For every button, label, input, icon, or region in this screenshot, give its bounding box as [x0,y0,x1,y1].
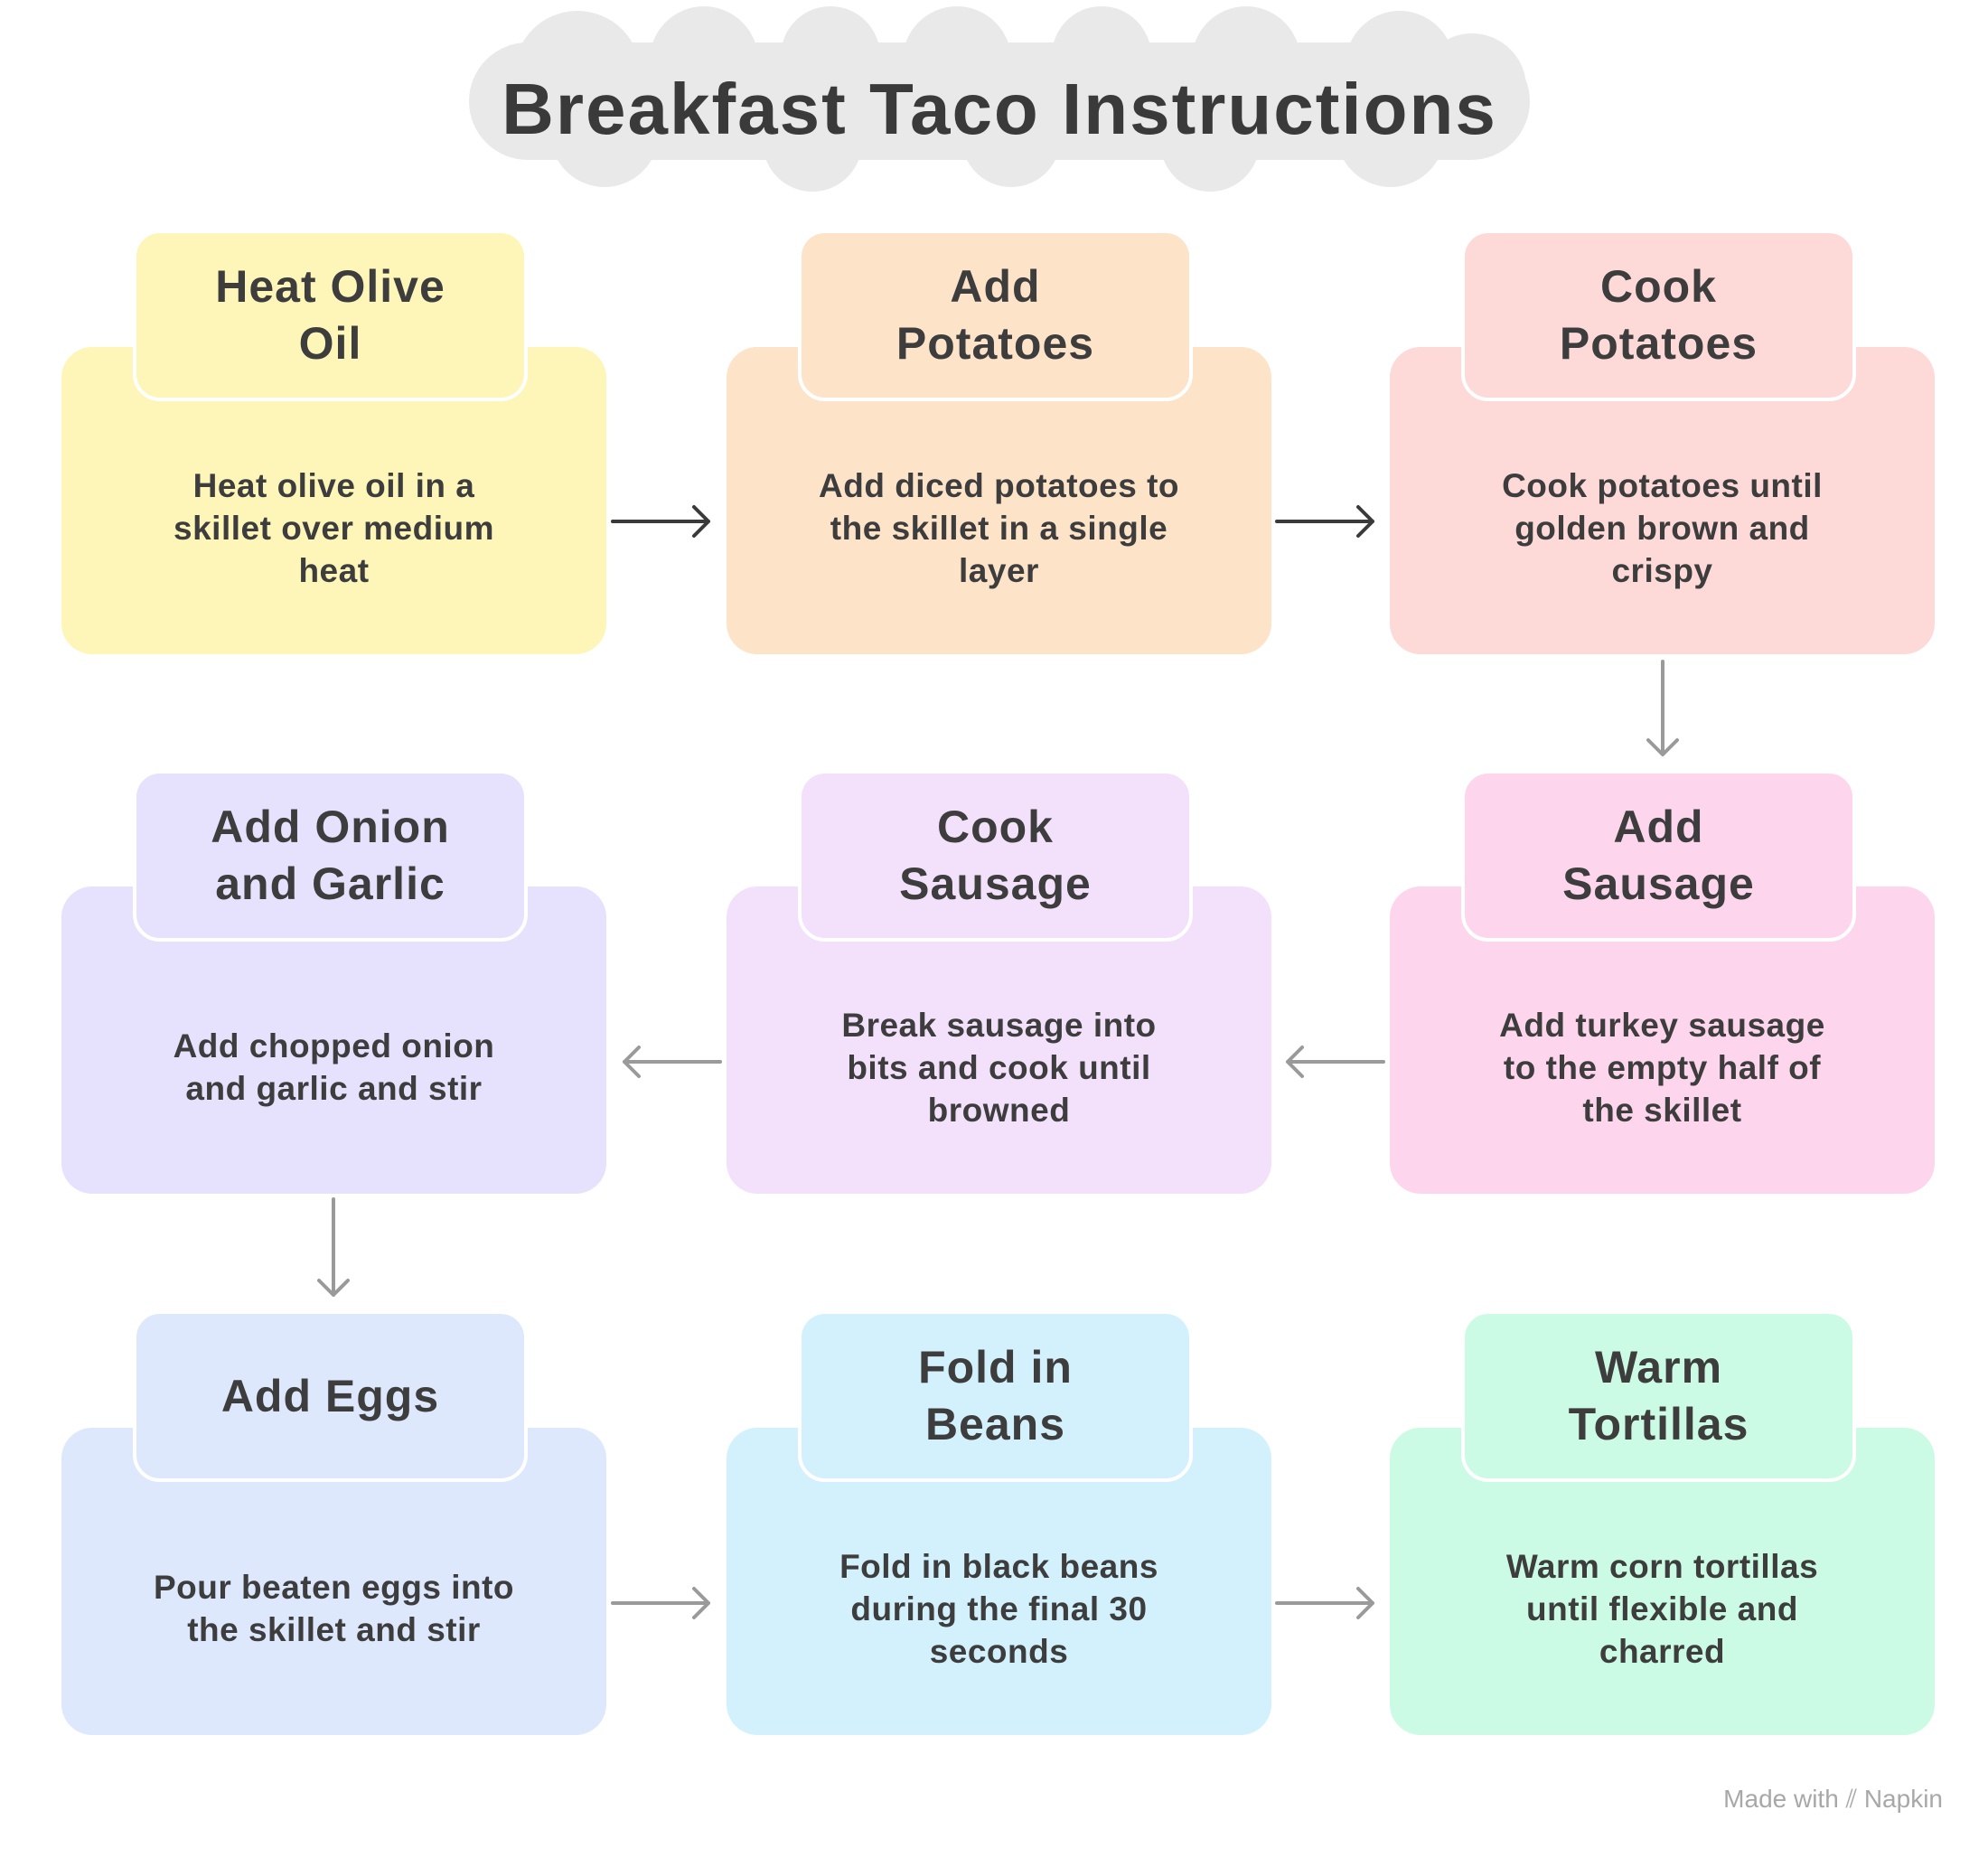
card 4 [61,886,606,1194]
tab 3: Cook [1600,261,1717,312]
tab 2: Add [950,261,1041,312]
card 9 [1390,1428,1935,1735]
tab 6: Add [1613,802,1704,852]
title cloud [469,6,1530,192]
tab 7 [133,1310,528,1482]
tab 6: Sausage [1562,858,1755,909]
text 7: Pour beaten eggs into the skillet and stir [154,1569,514,1648]
tab 1: Heat Olive [215,261,445,312]
tab 9 [1461,1310,1856,1482]
title: Breakfast Taco Instructions [502,69,1497,149]
tab 1 [133,230,528,401]
tab 9: Tortillas [1569,1399,1749,1449]
tab 9: Warm [1595,1342,1722,1393]
tab 3 [1461,230,1856,401]
card 7 [61,1428,606,1735]
text 3: Cook potatoes until golden brown and crispy [1502,466,1823,589]
text 5: Break sausage into bits and cook until browned [841,1007,1157,1128]
tab 8: Beans [925,1399,1065,1449]
card 8 [727,1428,1271,1735]
tab 2 [798,230,1193,401]
tab 2: Potatoes [896,318,1094,369]
tab 6 [1461,770,1856,942]
text 6: Add turkey sausage to the empty half of the skillet [1499,1007,1825,1128]
text 8: Fold in black beans during the final 30 seconds [839,1547,1158,1670]
card 2 [727,347,1271,654]
tab 7: Add Eggs [221,1370,439,1421]
tab 4: and Garlic [215,858,445,909]
card 3 [1390,347,1935,654]
tab 5: Sausage [899,858,1092,909]
text 4: Add chopped onion and garlic and stir [173,1027,494,1107]
tab 8 [798,1310,1193,1482]
footer: made with napkin: Made with ⫽ Napkin [1723,1785,1943,1813]
tab 5 [798,770,1193,942]
tab 3: Potatoes [1560,318,1758,369]
text 2: Add diced potatoes to the skillet in a single layer [819,466,1179,589]
card 6 [1390,886,1935,1194]
tab 4: Add Onion [211,802,450,852]
card 5 [727,886,1271,1194]
tab 8: Fold in [918,1342,1073,1393]
tab 5: Cook [937,802,1054,852]
text 1: Heat olive oil in a skillet over medium heat [173,466,494,589]
tab 4 [133,770,528,942]
tab 1: Oil [299,318,361,369]
card 1 [61,347,606,654]
text 9: Warm corn tortillas until flexible and charred [1506,1547,1818,1670]
